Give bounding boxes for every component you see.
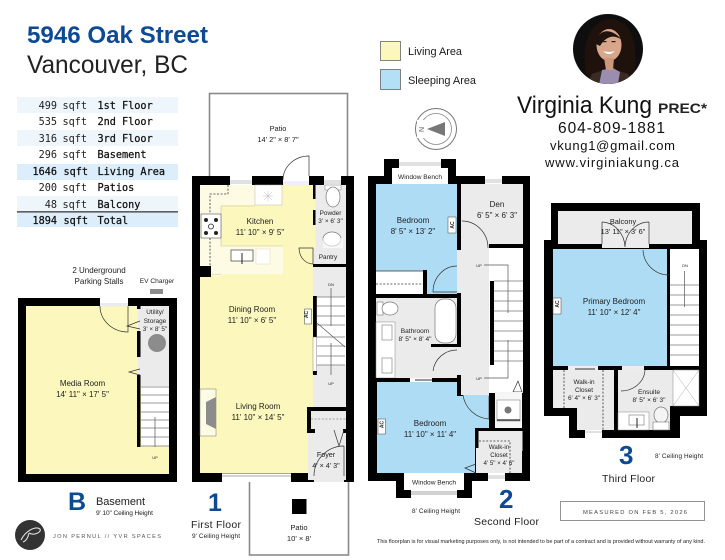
stair and foyer: AC <box>304 311 310 318</box>
area summary table: Balcony <box>98 200 140 211</box>
area summary table: 535 <box>39 117 57 128</box>
measured date box: MEASURED ON FEB 5, 2026 <box>583 510 687 516</box>
agent contact details: vkung1@gmail.com <box>550 138 675 153</box>
primary bedroom: AC <box>555 300 561 308</box>
windows and doors on rear wall <box>230 156 341 185</box>
upper bedroom: Bedroom <box>397 216 430 225</box>
label: media room <box>56 379 109 399</box>
upper bedroom <box>376 184 457 298</box>
den: Den <box>490 200 504 209</box>
powder room and pantry: Pantry <box>319 254 338 261</box>
balcony: 13' 11" × 3' 6" <box>601 227 646 236</box>
area summary table: Basement <box>98 150 147 161</box>
measured date box <box>560 502 704 520</box>
utility and stair zone: 3' × 8' 5" <box>143 326 167 333</box>
parking labels: Parking Stalls <box>75 277 123 286</box>
den: 6' 5" × 6' 3" <box>477 211 517 220</box>
balcony <box>558 211 692 248</box>
lower bedroom: 11' 10" × 11' 4" <box>404 430 456 439</box>
first floor caption <box>191 489 242 540</box>
kitchen cabinets <box>200 185 283 276</box>
area summary table: sqft <box>64 167 88 178</box>
area summary table: sqft <box>62 183 87 194</box>
bathroom: 8' 5" × 8' 4" <box>398 336 432 343</box>
title <box>27 22 208 79</box>
photographer logo and credit <box>15 520 161 550</box>
disclaimer: This floorplan is for visual marketing purposes only, is not intended to be part of a contract and is provided without warranty of any kind. <box>377 539 705 545</box>
dining room label <box>228 305 276 325</box>
utility and stair zone: Storage <box>144 318 167 325</box>
walk-in closet: 6' 4" × 6' 3" <box>568 395 600 402</box>
hall and stair: UP <box>476 263 482 268</box>
ensuite <box>618 366 699 430</box>
icon: compass: N <box>419 127 426 132</box>
dining room label: 11' 10" × 6' 5" <box>228 316 276 325</box>
agent contact details: PREC* <box>658 100 708 116</box>
legend <box>380 42 477 90</box>
legend: Sleeping Area <box>408 75 477 87</box>
area summary table: 2nd Floor <box>98 117 153 128</box>
walk-in closet: Closet <box>575 387 593 394</box>
walk-in closet: 4' 5" × 4' 6" <box>483 460 515 467</box>
area summary table: Total <box>98 216 128 227</box>
third floor plan <box>544 203 707 438</box>
den <box>461 176 523 244</box>
rear patio <box>210 94 348 178</box>
second floor caption: Second Floor <box>474 516 540 528</box>
lower bedroom: AC <box>380 421 386 428</box>
icon: compass <box>416 108 456 150</box>
area summary table: 1646 <box>32 167 57 178</box>
walk-in closet: Closet <box>490 452 508 459</box>
third floor caption <box>602 440 703 485</box>
first floor caption: First Floor <box>191 519 242 531</box>
lower bedroom: Bedroom <box>414 419 447 428</box>
balcony: Balcony <box>610 217 636 226</box>
utility and stair zone: Utility/ <box>146 309 164 316</box>
legend: Living Area <box>408 46 463 58</box>
agent contact details: www.virginiakung.ca <box>544 155 680 170</box>
lower window bench: Window Bench <box>412 480 456 486</box>
area summary table: 499 <box>39 101 57 112</box>
kitchen wall stub <box>200 266 211 277</box>
agent contact details: 604-809-1881 <box>558 120 665 137</box>
area summary table: 296 <box>39 150 57 161</box>
primary bedroom: 11' 10" × 12' 4" <box>588 308 641 317</box>
ensuite: Ensuite <box>638 389 660 396</box>
bathroom: Bathroom <box>401 328 430 335</box>
area summary table: 200 <box>39 183 57 194</box>
upper window bench: Window Bench <box>398 174 442 181</box>
first floor plan <box>192 94 354 555</box>
area summary table: sqft <box>62 134 87 145</box>
area summary table: 316 <box>39 134 57 145</box>
stair: DN <box>682 263 688 268</box>
stair and foyer: Foyer <box>317 450 336 459</box>
dining room label: Dining Room <box>229 305 275 314</box>
area summary table: 1st Floor <box>98 101 153 112</box>
basement floor plan <box>18 298 177 482</box>
utility and stair zone: UP <box>152 455 158 460</box>
primary bedroom <box>553 249 669 366</box>
parking labels: 2 Underground <box>72 266 126 275</box>
parking labels <box>72 266 175 294</box>
lower window bench <box>404 473 464 498</box>
label: media room: Media Room <box>60 379 106 388</box>
walls <box>368 159 530 498</box>
kitchen label: Kitchen <box>247 217 273 226</box>
area summary table: sqft <box>62 150 87 161</box>
area summary table: Patios <box>98 183 134 194</box>
lower bedroom <box>377 382 489 473</box>
area summary table: 48 <box>45 200 57 211</box>
kitchen label: 11' 10" × 9' 5" <box>236 228 284 237</box>
hall and stair: UP <box>476 376 482 381</box>
agent portrait <box>573 14 643 90</box>
basement caption <box>68 488 153 517</box>
stair and foyer <box>304 267 346 482</box>
kitchen label <box>236 217 284 237</box>
basement caption: 9' 10" Ceiling Height <box>96 510 153 517</box>
parking labels: EV Charger <box>140 278 175 285</box>
upper window bench <box>392 159 448 184</box>
area summary table: sqft <box>62 101 87 112</box>
rear patio: Patio <box>270 124 286 133</box>
area summary table: 1894 <box>32 216 57 227</box>
third floor caption: 8' Ceiling Height <box>655 453 703 460</box>
area summary table: sqft <box>64 216 88 227</box>
first floor caption: 1 <box>208 489 222 517</box>
third floor caption: 3 <box>619 440 633 470</box>
agent contact details <box>517 92 708 170</box>
walk-in closet: Walk-in <box>573 379 595 386</box>
living room label: 11' 10" × 14' 5" <box>232 413 285 422</box>
front window <box>222 473 291 482</box>
basement caption: Basement <box>96 496 145 508</box>
basement caption: B <box>68 488 86 516</box>
shower <box>489 392 522 428</box>
area summary table: 3rd Floor <box>98 134 153 145</box>
second floor caption: 2 <box>499 484 513 514</box>
front patio: Patio <box>290 523 308 532</box>
walk-in closet <box>465 428 523 481</box>
title: 5946 Oak Street <box>27 22 208 49</box>
stair <box>670 249 699 366</box>
primary bedroom: Primary Bedroom <box>583 297 645 306</box>
powder room and pantry: 3' × 6' 3" <box>318 218 343 225</box>
stair and foyer: 4' × 4' 3" <box>312 461 340 470</box>
ensuite: 8' 5" × 6' 3" <box>632 397 666 404</box>
living room label: Living Room <box>236 402 281 411</box>
photographer logo and credit: JON PERNUL // YVR SPACES <box>53 534 161 540</box>
walls <box>544 203 707 438</box>
title: Vancouver, BC <box>27 51 188 79</box>
bathroom <box>376 294 461 378</box>
basement door <box>100 298 128 332</box>
living room label <box>232 402 285 422</box>
stair and foyer: DN <box>328 282 334 287</box>
label: media room: 14' 11" × 17' 5" <box>56 390 109 399</box>
upper bedroom: 8' 5" × 13' 2" <box>391 227 435 236</box>
upper bedroom: AC <box>450 221 456 229</box>
front patio: 10' × 8' <box>287 534 312 543</box>
area summary table: sqft <box>62 117 87 128</box>
agent contact details: Virginia Kung <box>517 92 652 119</box>
powder room and pantry: Powder <box>320 210 342 217</box>
second floor caption: 8' Ceiling Height <box>412 508 460 515</box>
hall and stair <box>433 221 523 395</box>
third floor caption: Third Floor <box>602 473 656 485</box>
first floor caption: 9' Ceiling Height <box>192 533 240 540</box>
area summary table: Living Area <box>98 167 165 178</box>
second floor caption <box>412 484 540 528</box>
powder room and pantry <box>299 185 346 268</box>
walk-in closet: Walk-in <box>489 444 510 451</box>
fireplace <box>200 389 216 436</box>
second floor plan <box>368 159 530 498</box>
stair and foyer: UP <box>328 381 334 386</box>
utility and stair zone <box>127 306 169 460</box>
area summary table: sqft <box>62 200 87 211</box>
rear patio: 14' 2" × 8' 7" <box>257 135 299 144</box>
walk-in closet <box>553 366 614 438</box>
area summary table <box>17 97 178 227</box>
front patio <box>250 480 348 555</box>
